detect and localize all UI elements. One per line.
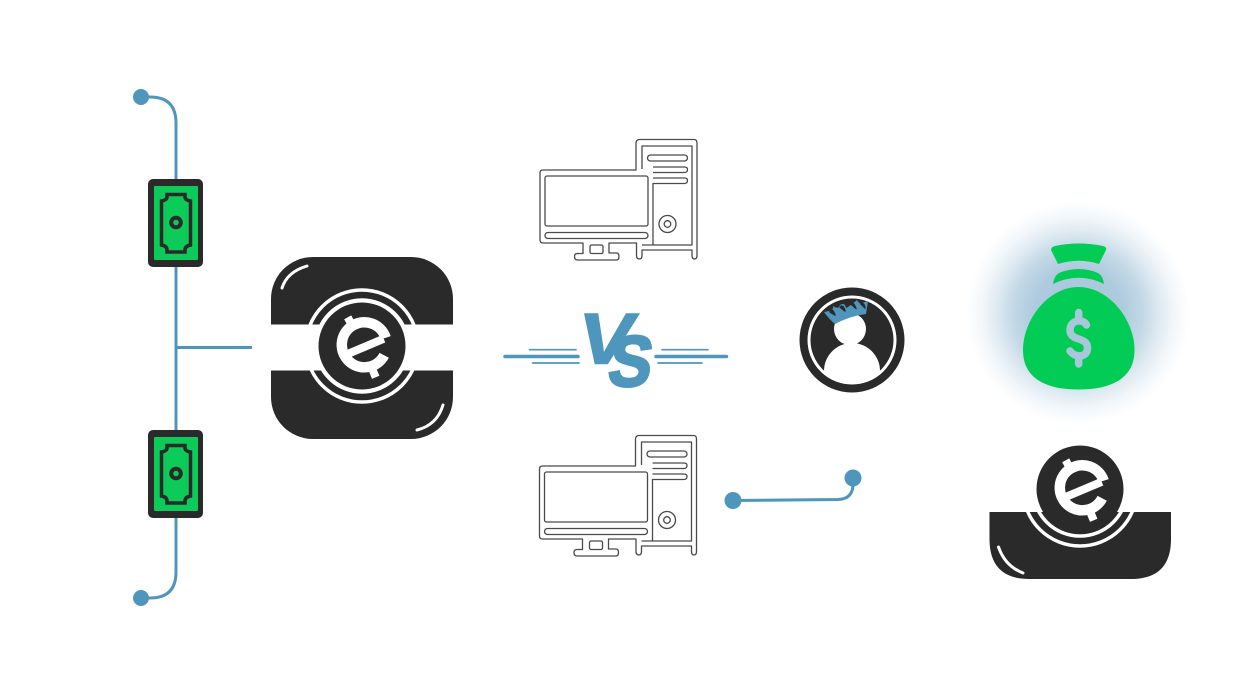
icon: money bag <box>1023 244 1134 390</box>
icon: desktop computer top <box>540 140 697 260</box>
glow behind money bag <box>966 201 1190 425</box>
connector: vertical line with end dots and branch <box>133 89 252 606</box>
icon: banknote bottom <box>148 430 203 518</box>
icon: desktop computer bottom <box>540 436 696 556</box>
icon: banknote top <box>148 179 203 267</box>
icon: coin logo tile <box>265 257 459 439</box>
versus badge <box>505 298 726 402</box>
versus badge: V <box>571 298 643 379</box>
infographic canvas <box>133 89 1180 606</box>
versus badge: S <box>604 321 658 402</box>
icon: coin dropping into tray <box>990 432 1171 579</box>
connector: lower computer to user <box>724 470 862 509</box>
icon: crowned user <box>800 288 904 399</box>
